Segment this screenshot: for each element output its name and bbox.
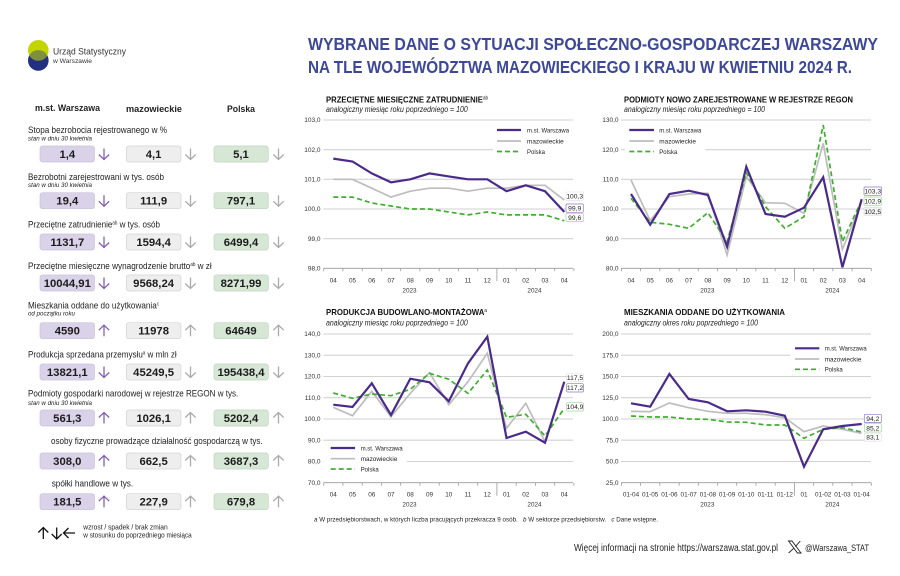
value labels: 104,9 <box>567 404 584 411</box>
legend <box>795 346 867 374</box>
legend: m.st. Warszawa <box>527 127 569 134</box>
row: bezrobotni <box>28 172 284 209</box>
value labels <box>566 192 583 222</box>
legend: m.st. Warszawa <box>825 346 867 353</box>
grid lines and axis: 75,0 <box>606 437 619 444</box>
grid lines and axis: 90,0 <box>606 236 619 243</box>
grid lines and axis: 09 <box>724 278 731 284</box>
row: bezrobotni: Bezrobotni zarejestrowani w tys. osób <box>28 172 164 182</box>
row: wynagrodzenie: 9568,24 <box>133 278 175 290</box>
logo <box>28 40 126 71</box>
legend <box>497 127 569 156</box>
grid lines and axis: 12 <box>484 492 491 499</box>
grid lines and axis: 200,0 <box>602 331 619 338</box>
grid lines and axis: 12 <box>484 278 491 284</box>
grid lines and axis: 110,0 <box>603 176 619 184</box>
row: spółki handlowe: 227,9 <box>139 497 168 509</box>
legend: mazowieckie <box>659 138 696 145</box>
logo: w Warszawie <box>52 58 92 65</box>
grid lines and axis: 01-11 <box>758 492 774 499</box>
row: bezrobotni: 797,1 <box>227 196 255 208</box>
grid lines and axis: 05 <box>647 278 654 284</box>
series: Polska <box>631 125 862 242</box>
value labels: 117,2 <box>567 385 583 392</box>
grid lines and axis: 04 <box>858 278 866 284</box>
grid lines and axis: 140,0 <box>304 331 321 338</box>
row: bezrobotni: 111,9 <box>140 196 167 208</box>
series: m.st. Warszawa <box>333 159 564 212</box>
chart title: PRODUKCJA BUDOWLANO-MONTAŻOWA <box>326 307 498 317</box>
grid lines and axis: 99,0 <box>308 236 321 243</box>
row: zatrudnienie: 6499,4 <box>224 237 259 249</box>
grid lines and axis: 10 <box>445 492 453 499</box>
grid lines and axis: 01-04 <box>623 492 640 499</box>
row: produkcja sprzedana: a <box>143 350 146 356</box>
grid lines and axis: 150,0 <box>602 374 619 381</box>
chart title: PRZECIĘTNE MIESIĘCZNE ZATRUDNIENIE <box>326 94 499 104</box>
grid lines and axis: 11 <box>465 278 472 284</box>
legend <box>629 127 702 156</box>
grid lines and axis: 125,0 <box>602 395 619 402</box>
chart title: ab <box>483 96 488 102</box>
grid lines and axis: 01-06 <box>661 492 678 499</box>
grid lines and axis: 100,0 <box>304 416 321 423</box>
row: mieszkania: od początku roku <box>28 310 75 318</box>
grid lines and axis: 08 <box>407 492 414 499</box>
grid lines and axis: 09 <box>426 492 433 499</box>
row: wynagrodzenie: w zł <box>195 261 212 271</box>
row: wynagrodzenie: ab <box>190 262 196 268</box>
grid lines and axis: 110,0 <box>305 395 321 402</box>
row: stopa bezrobocia: Stopa bezrobocia rejestrowanego w % <box>28 125 167 135</box>
series: mazowieckie <box>333 179 564 200</box>
row: produkcja sprzedana: 13821,1 <box>47 367 88 379</box>
value labels <box>864 187 882 216</box>
grid lines and axis: 100,0 <box>602 416 619 423</box>
chart title: PODMIOTY NOWO ZAREJESTROWANE W REJESTRZE REGON <box>624 94 853 104</box>
grid lines and axis: 130,0 <box>304 352 321 359</box>
grid lines and axis: 12 <box>781 278 789 284</box>
row: wynagrodzenie: 8271,99 <box>221 278 261 290</box>
value labels: 100,3 <box>566 194 583 201</box>
grid lines and axis: 175,0 <box>602 352 619 359</box>
series: mazowieckie <box>631 143 862 255</box>
grid lines and axis: 01-03 <box>834 492 851 499</box>
row: mieszkania: 4590 <box>55 326 80 338</box>
value labels: 99,9 <box>568 206 581 213</box>
row: stopa bezrobocia <box>28 125 284 162</box>
icon: X logo <box>788 541 801 553</box>
row: spółki handlowe: spółki handlowe w tys. <box>52 479 133 489</box>
row: podmioty REGON <box>28 389 284 426</box>
legend <box>331 445 403 473</box>
grid lines and axis: 2023 <box>402 502 417 508</box>
row: produkcja sprzedana: 45249,5 <box>133 367 174 379</box>
arrow legend <box>38 525 192 540</box>
value labels: 83,1 <box>866 435 880 442</box>
grid lines and axis: 80,0 <box>606 266 619 272</box>
arrow legend: w stosunku do poprzedniego miesiąca <box>82 532 192 540</box>
grid lines and axis: 2023 <box>700 288 715 294</box>
legend background <box>790 341 874 374</box>
series: m.st. Warszawa <box>333 337 564 443</box>
row: podmioty REGON: 1026,1 <box>136 413 171 425</box>
grid lines and axis: 01 <box>800 278 808 284</box>
row: wynagrodzenie: Przeciętne miesięczne wynagrodzenie brutto <box>28 261 208 271</box>
grid lines and axis: 120,0 <box>602 147 619 154</box>
grid lines and axis: 98,0 <box>308 266 321 272</box>
grid lines and axis: 02 <box>522 492 530 499</box>
column headings: mazowieckie <box>126 104 182 115</box>
grid lines and axis: 90,0 <box>308 437 321 444</box>
row: osoby fizyczne: osoby fizyczne prowadzące działalność gospodarczą w tys. <box>51 436 263 446</box>
grid lines and axis: 01 <box>503 278 510 284</box>
legend: mazowieckie <box>527 138 564 145</box>
value labels: 99,6 <box>568 215 581 222</box>
series: mazowieckie <box>333 353 564 442</box>
grid lines and axis: 04 <box>330 278 337 284</box>
footnote: a W przedsiębiorstwach, w których liczba pracujących przekracza 9 osób. b W sektorze przedsiębiorstw. c Dane wstępne. <box>314 516 658 524</box>
row: wynagrodzenie <box>28 261 284 291</box>
grid lines and axis: 06 <box>368 278 376 284</box>
row: podmioty REGON: 5202,4 <box>224 413 259 425</box>
value labels: 102,9 <box>864 199 881 206</box>
row: stopa bezrobocia: 1,4 <box>59 149 76 161</box>
grid lines and axis: 06 <box>666 278 673 284</box>
value labels <box>864 414 881 442</box>
series: m.st. Warszawa <box>631 374 862 467</box>
chart subtitle: analogiczny okres roku poprzedniego = 100 <box>624 318 758 328</box>
grid lines and axis: 25,0 <box>606 480 619 487</box>
grid lines and axis: 100,0 <box>304 206 321 213</box>
row: osoby fizyczne <box>40 436 284 469</box>
panel: indicators table <box>28 125 284 510</box>
chart: mieszkania oddane do użytkowania <box>602 307 881 508</box>
series: Polska <box>631 416 862 438</box>
chart: podmioty nowo zarejestrowane <box>602 94 882 294</box>
chart subtitle: analogiczny miesiąc roku poprzedniego = 100 <box>326 318 468 328</box>
legend: mazowieckie <box>825 356 862 363</box>
grid lines and axis: 09 <box>426 278 433 284</box>
grid lines and axis: 07 <box>387 492 395 499</box>
chart subtitle: analogiczny miesiąc roku poprzedniego = 100 <box>624 105 765 114</box>
grid lines and axis <box>602 117 871 294</box>
grid lines and axis <box>602 331 871 508</box>
series: mazowieckie <box>631 403 862 433</box>
row: mieszkania: Mieszkania oddane do użytkowania <box>28 301 172 311</box>
grid lines and axis: 01-02 <box>815 492 832 499</box>
series: Polska <box>333 370 564 436</box>
column headings <box>35 103 256 115</box>
grid lines and axis: 2023 <box>700 502 715 508</box>
grid lines and axis: 01-04 <box>854 492 870 499</box>
row: produkcja sprzedana: w mln zł <box>145 349 177 359</box>
grid lines and axis: 02 <box>522 278 530 284</box>
row: bezrobotni: stan w dniu 30 kwietnia <box>28 182 92 189</box>
grid lines and axis: 03 <box>541 492 549 499</box>
grid lines and axis: 01-07 <box>681 492 697 499</box>
grid lines and axis: 10 <box>445 278 453 284</box>
grid lines and axis: 100,0 <box>602 206 619 213</box>
value labels: 117,5 <box>567 375 583 382</box>
legend: m.st. Warszawa <box>361 445 403 452</box>
row: osoby fizyczne: 308,0 <box>53 456 81 468</box>
logo: Urząd Statystyczny <box>53 46 126 57</box>
grid lines and axis: 01 <box>503 492 510 499</box>
grid lines and axis: 2024 <box>527 502 542 508</box>
row: produkcja sprzedana <box>28 349 284 380</box>
grid lines and axis: 06 <box>368 492 376 499</box>
grid lines and axis: 70,0 <box>308 480 321 487</box>
row: osoby fizyczne: 3687,3 <box>224 456 258 468</box>
row: zatrudnienie: Przeciętne zatrudnienie <box>28 219 123 229</box>
row: zatrudnienie: 1131,7 <box>50 237 84 249</box>
row: podmioty REGON: Podmioty gospodarki narodowej w rejestrze REGON w tys. <box>28 389 238 399</box>
grid lines and axis: 01-10 <box>738 492 755 499</box>
grid lines and axis: 103,0 <box>304 117 321 124</box>
grid lines and axis: 01-12 <box>777 492 793 499</box>
grid lines and axis <box>304 331 574 508</box>
row: mieszkania <box>28 301 284 339</box>
value labels: 85,2 <box>866 425 880 432</box>
grid lines and axis: 07 <box>387 278 395 284</box>
row: zatrudnienie: 1594,4 <box>136 237 172 249</box>
grid lines and axis: 04 <box>627 278 635 284</box>
grid lines and axis: 03 <box>839 278 846 284</box>
grid lines and axis: 08 <box>704 278 712 284</box>
grid lines and axis: 05 <box>349 278 356 284</box>
grid lines and axis: 01 <box>800 492 808 499</box>
legend background <box>493 123 574 156</box>
row: mieszkania: 11978 <box>138 326 169 338</box>
row: podmioty REGON: 561,3 <box>53 413 81 425</box>
grid lines and axis <box>304 117 574 294</box>
grid lines and axis: 03 <box>541 278 549 284</box>
series: m.st. Warszawa <box>631 167 862 267</box>
value labels: 103,3 <box>864 189 881 196</box>
legend: Polska <box>659 149 678 156</box>
row: spółki handlowe: 181,5 <box>53 497 81 509</box>
grid lines and axis: 80,0 <box>308 459 321 466</box>
row: produkcja sprzedana: 195438,4 <box>217 367 265 379</box>
column headings: Polska <box>227 104 256 115</box>
legend background <box>625 123 706 156</box>
grid lines and axis: 102,0 <box>304 147 321 154</box>
row: wynagrodzenie: 10044,91 <box>44 278 91 290</box>
row: bezrobotni: 19,4 <box>56 196 79 208</box>
value labels <box>567 374 584 411</box>
row: stopa bezrobocia: 4,1 <box>146 149 161 161</box>
grid lines and axis: 2024 <box>825 288 840 294</box>
grid lines and axis: 02 <box>820 278 827 284</box>
grid lines and axis: 11 <box>762 278 769 284</box>
column headings: m.st. Warszawa <box>35 103 101 114</box>
row: zatrudnienie: ab <box>112 220 118 226</box>
legend: mazowieckie <box>361 456 398 463</box>
grid lines and axis: 11 <box>465 492 472 499</box>
row: stopa bezrobocia: 5,1 <box>233 149 249 161</box>
grid lines and axis: 101,0 <box>304 176 321 184</box>
grid lines and axis: 120,0 <box>304 374 321 381</box>
grid lines and axis: 2024 <box>527 288 542 294</box>
legend background <box>324 443 407 476</box>
grid lines and axis: 04 <box>561 492 568 499</box>
chart title: a <box>484 308 487 314</box>
row: mieszkania: 64649 <box>225 326 257 338</box>
chart: produkcja budowlano-montażowa <box>304 307 584 508</box>
arrow legend: wzrost / spadek / brak zmian <box>82 525 168 532</box>
grid lines and axis: 10 <box>743 278 750 284</box>
grid lines and axis: 01-05 <box>642 492 659 499</box>
grid lines and axis: 01-08 <box>700 492 717 499</box>
chart: przeciętne zatrudnienie <box>304 94 583 294</box>
website link: Więcej informacji na stronie https://warszawa.stat.gov.pl <box>574 543 778 554</box>
legend: Polska <box>825 367 843 374</box>
row: spółki handlowe: 679,8 <box>227 497 255 509</box>
legend: m.st. Warszawa <box>659 127 702 134</box>
chart subtitle: analogiczny miesiąc roku poprzedniego = 100 <box>326 105 468 114</box>
legend: Polska <box>527 149 545 156</box>
row: stopa bezrobocia: stan w dniu 30 kwietnia <box>28 136 92 142</box>
grid lines and axis: 04 <box>330 492 337 499</box>
series: Polska <box>333 197 564 221</box>
grid lines and axis: 50,0 <box>606 459 619 466</box>
row: podmioty REGON: stan w dniu 30 kwietnia <box>28 400 92 407</box>
row: produkcja sprzedana: Produkcja sprzedana przemysłu <box>28 349 157 359</box>
value labels: 94,2 <box>866 416 880 423</box>
grid lines and axis: 04 <box>561 278 568 284</box>
X handle: @Warszawa_STAT <box>805 543 870 553</box>
grid lines and axis: 07 <box>685 278 693 284</box>
row: zatrudnienie <box>28 219 284 250</box>
row: zatrudnienie: w tys. osób <box>117 219 160 229</box>
grid lines and axis: 05 <box>349 492 356 499</box>
grid lines and axis: 2024 <box>825 502 840 508</box>
grid lines and axis: 130,0 <box>602 117 619 124</box>
chart title: MIESZKANIA ODDANE DO UŻYTKOWANIA <box>624 307 785 317</box>
value labels: 102,5 <box>864 209 881 216</box>
grid lines and axis: 01-09 <box>719 492 736 499</box>
title <box>308 34 878 77</box>
grid lines and axis: 08 <box>407 278 414 284</box>
legend: Polska <box>361 466 379 473</box>
row: osoby fizyczne: 662,5 <box>139 456 168 468</box>
grid lines and axis: 2023 <box>402 288 417 294</box>
row: mieszkania: c <box>157 302 159 308</box>
row: spółki handlowe <box>40 479 284 510</box>
